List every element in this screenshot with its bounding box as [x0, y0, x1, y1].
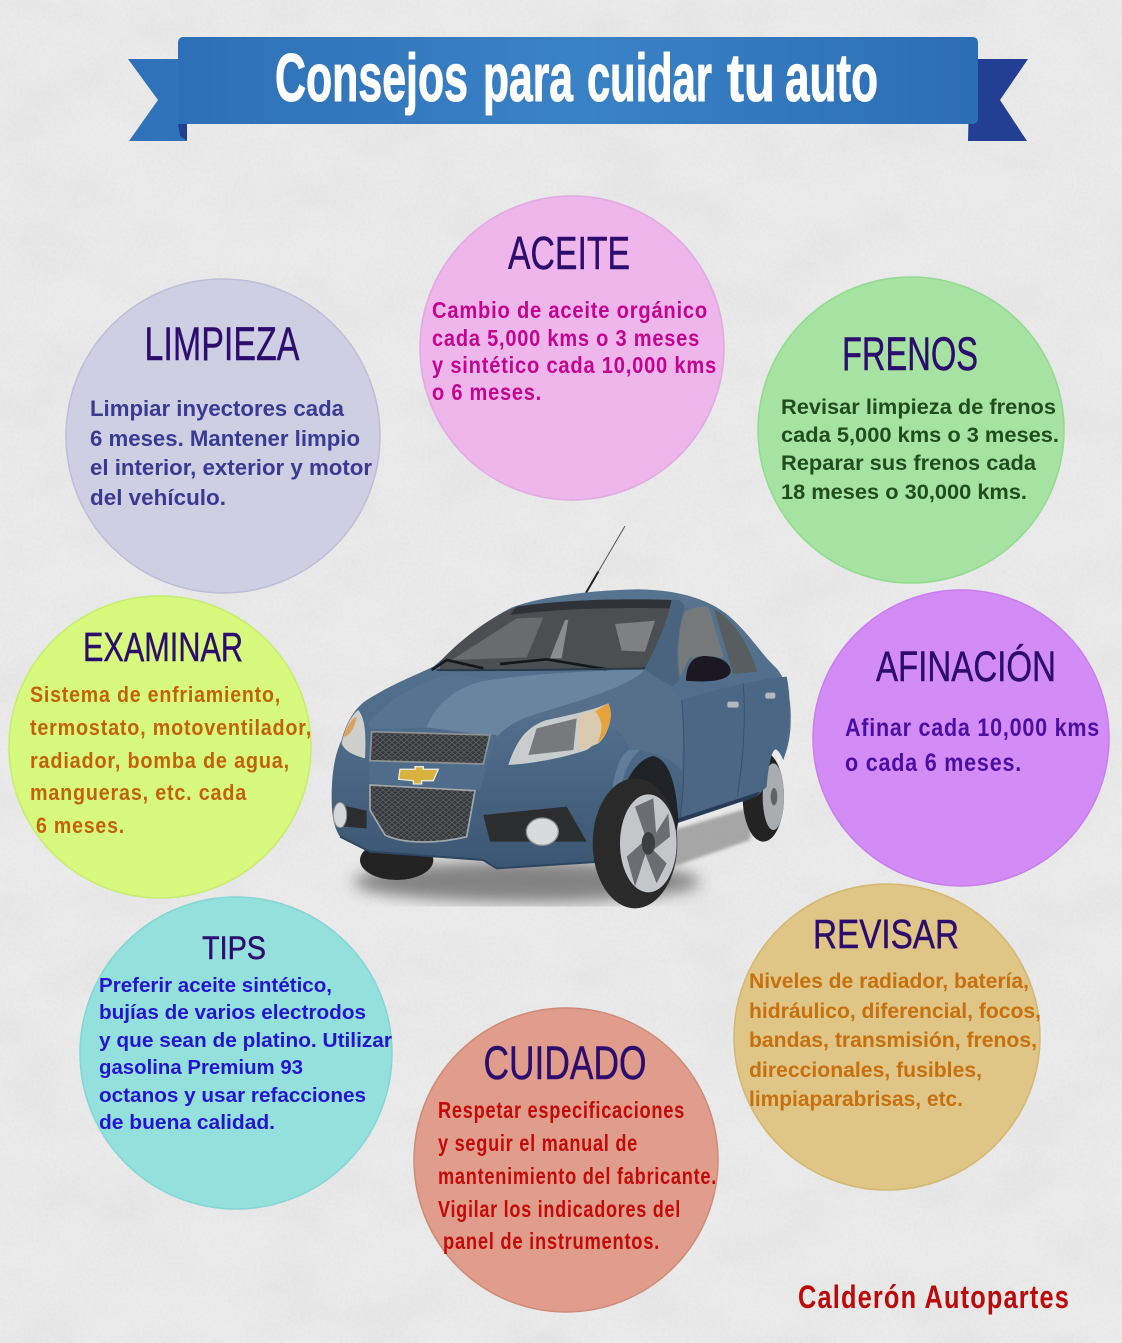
front side window: [678, 607, 724, 677]
wipers: [432, 659, 607, 670]
text: revisar: bandas, transmisión, frenos,: [749, 1029, 1037, 1052]
text: limpieza: Limpiar inyectores cada: [90, 396, 345, 421]
front fender highlight: [520, 670, 683, 770]
text: tips: Preferir aceite sintético,: [99, 975, 332, 997]
left headlight: [342, 710, 365, 758]
hood center highlight: [427, 670, 645, 737]
lower grille: [370, 785, 475, 842]
text: tips: [99, 975, 392, 1134]
text: aceite: o 6 meses.: [432, 379, 542, 405]
panel: cuidado: [414, 1008, 718, 1312]
text: cuidado: mantenimiento del fabricante.: [438, 1163, 717, 1189]
left fog light: [333, 802, 347, 828]
heading: limpieza: LIMPIEZA: [144, 317, 300, 370]
text: frenos: [781, 396, 1059, 504]
text: tips: de buena calidad.: [99, 1112, 275, 1134]
body side shade: [682, 677, 790, 818]
text: frenos: Revisar limpieza de frenos: [781, 396, 1056, 419]
text: aceite: y sintético cada 10,000 kms: [432, 352, 717, 378]
text: cuidado: y seguir el manual de: [438, 1130, 638, 1156]
front left wheel: [360, 840, 433, 880]
car body: [332, 589, 791, 868]
door handles: [727, 693, 775, 708]
car shadow: [353, 807, 753, 902]
text: cuidado: [438, 1097, 717, 1254]
text: cuidado: Vigilar los indicadores del: [438, 1196, 681, 1222]
text: examinar: Sistema de enfriamiento,: [30, 682, 281, 707]
bumper lip: [340, 837, 617, 868]
text: tips: bujías de varios electrodos: [99, 1002, 366, 1024]
front right wheel: [593, 778, 677, 908]
text: frenos: Reparar sus frenos cada: [781, 452, 1036, 475]
panel: tips: [80, 897, 392, 1209]
panel: examinar: [9, 596, 312, 898]
text: limpieza: el interior, exterior y motor: [90, 455, 372, 480]
title: tu: [727, 40, 775, 116]
heading: examinar: EXAMINAR: [83, 624, 243, 670]
text: aceite: cada 5,000 kms o 3 meses: [432, 325, 700, 351]
title banner: [128, 37, 1028, 141]
title: [275, 40, 878, 116]
title: auto: [785, 40, 878, 116]
left vent: [344, 806, 367, 828]
panel: limpieza: [66, 279, 380, 593]
text: examinar: mangueras, etc. cada: [30, 780, 247, 805]
wheel arch: [613, 756, 678, 857]
text: aceite: Cambio de aceite orgánico: [432, 297, 708, 323]
right fog light: [526, 818, 558, 845]
grille surround panel: [367, 728, 497, 790]
antenna: [585, 526, 625, 594]
text: revisar: direccionales, fusibles,: [749, 1059, 982, 1082]
windshield tint band: [510, 599, 672, 615]
illustration: car: [332, 526, 791, 908]
panel: frenos: [758, 277, 1064, 583]
title: Consejos: [275, 40, 468, 116]
far rear wheel: [743, 752, 784, 842]
heading: revisar: REVISAR: [813, 911, 959, 957]
heading: frenos: FRENOS: [842, 327, 978, 380]
upper grille: [370, 732, 490, 764]
windshield left pane: [452, 617, 543, 660]
text: tips: gasolina Premium 93: [99, 1057, 303, 1079]
left ribbon tail: [128, 59, 187, 141]
arch rim highlight: [611, 750, 640, 853]
text: examinar: termostato, motoventilador,: [30, 715, 312, 740]
title: para: [483, 40, 574, 116]
heading: tips: TIPS: [202, 930, 266, 966]
text: limpieza: del vehículo.: [90, 485, 226, 510]
text: tips: octanos y usar refacciones: [99, 1085, 366, 1107]
text: aceite: [432, 297, 717, 405]
rear side window: [714, 609, 757, 674]
text: examinar: 6 meses.: [36, 813, 125, 838]
text: revisar: [749, 970, 1041, 1111]
text: cuidado: panel de instrumentos.: [443, 1228, 660, 1254]
lower sill: [677, 792, 760, 823]
panel: revisar: [734, 884, 1041, 1190]
text: revisar: hidráulico, diferencial, focos,: [749, 1000, 1041, 1023]
bumper vent: [483, 807, 587, 842]
text: examinar: radiador, bomba de agua,: [30, 748, 290, 773]
right ribbon tail: [968, 59, 1028, 141]
text: frenos: 18 meses o 30,000 kms.: [781, 481, 1027, 504]
text: limpieza: 6 meses. Mantener limpio: [90, 426, 360, 451]
heading: aceite: ACEITE: [508, 227, 630, 279]
text: examinar: [30, 682, 312, 838]
hood left: [368, 673, 490, 729]
right headlight: [508, 703, 611, 765]
heading: afinacion: AFINACIÓN: [876, 643, 1056, 691]
text: afinacion: [845, 714, 1100, 777]
text: frenos: cada 5,000 kms o 3 meses.: [781, 424, 1059, 447]
text: limpieza: [90, 396, 372, 510]
cowl shadow: [437, 668, 645, 670]
windshield right pane: [615, 621, 655, 652]
text: revisar: limpiaparabrisas, etc.: [749, 1088, 963, 1111]
text: tips: y que sean de platino. Utilizar: [99, 1030, 392, 1052]
text: revisar: Niveles de radiador, batería,: [749, 970, 1029, 993]
bowtie logo: [399, 767, 438, 784]
heading: cuidado: CUIDADO: [484, 1036, 646, 1089]
text: cuidado: Respetar especificaciones: [438, 1097, 685, 1123]
door lines: [680, 683, 744, 818]
text: afinacion: o cada 6 meses.: [845, 749, 1022, 777]
panel: aceite: [420, 196, 724, 500]
title: cuidar: [587, 40, 712, 116]
panel: afinacion: [813, 590, 1109, 886]
interior gap: [550, 620, 568, 658]
mirror: [686, 656, 731, 681]
windshield: [440, 599, 672, 670]
roof pillar: [645, 599, 685, 687]
